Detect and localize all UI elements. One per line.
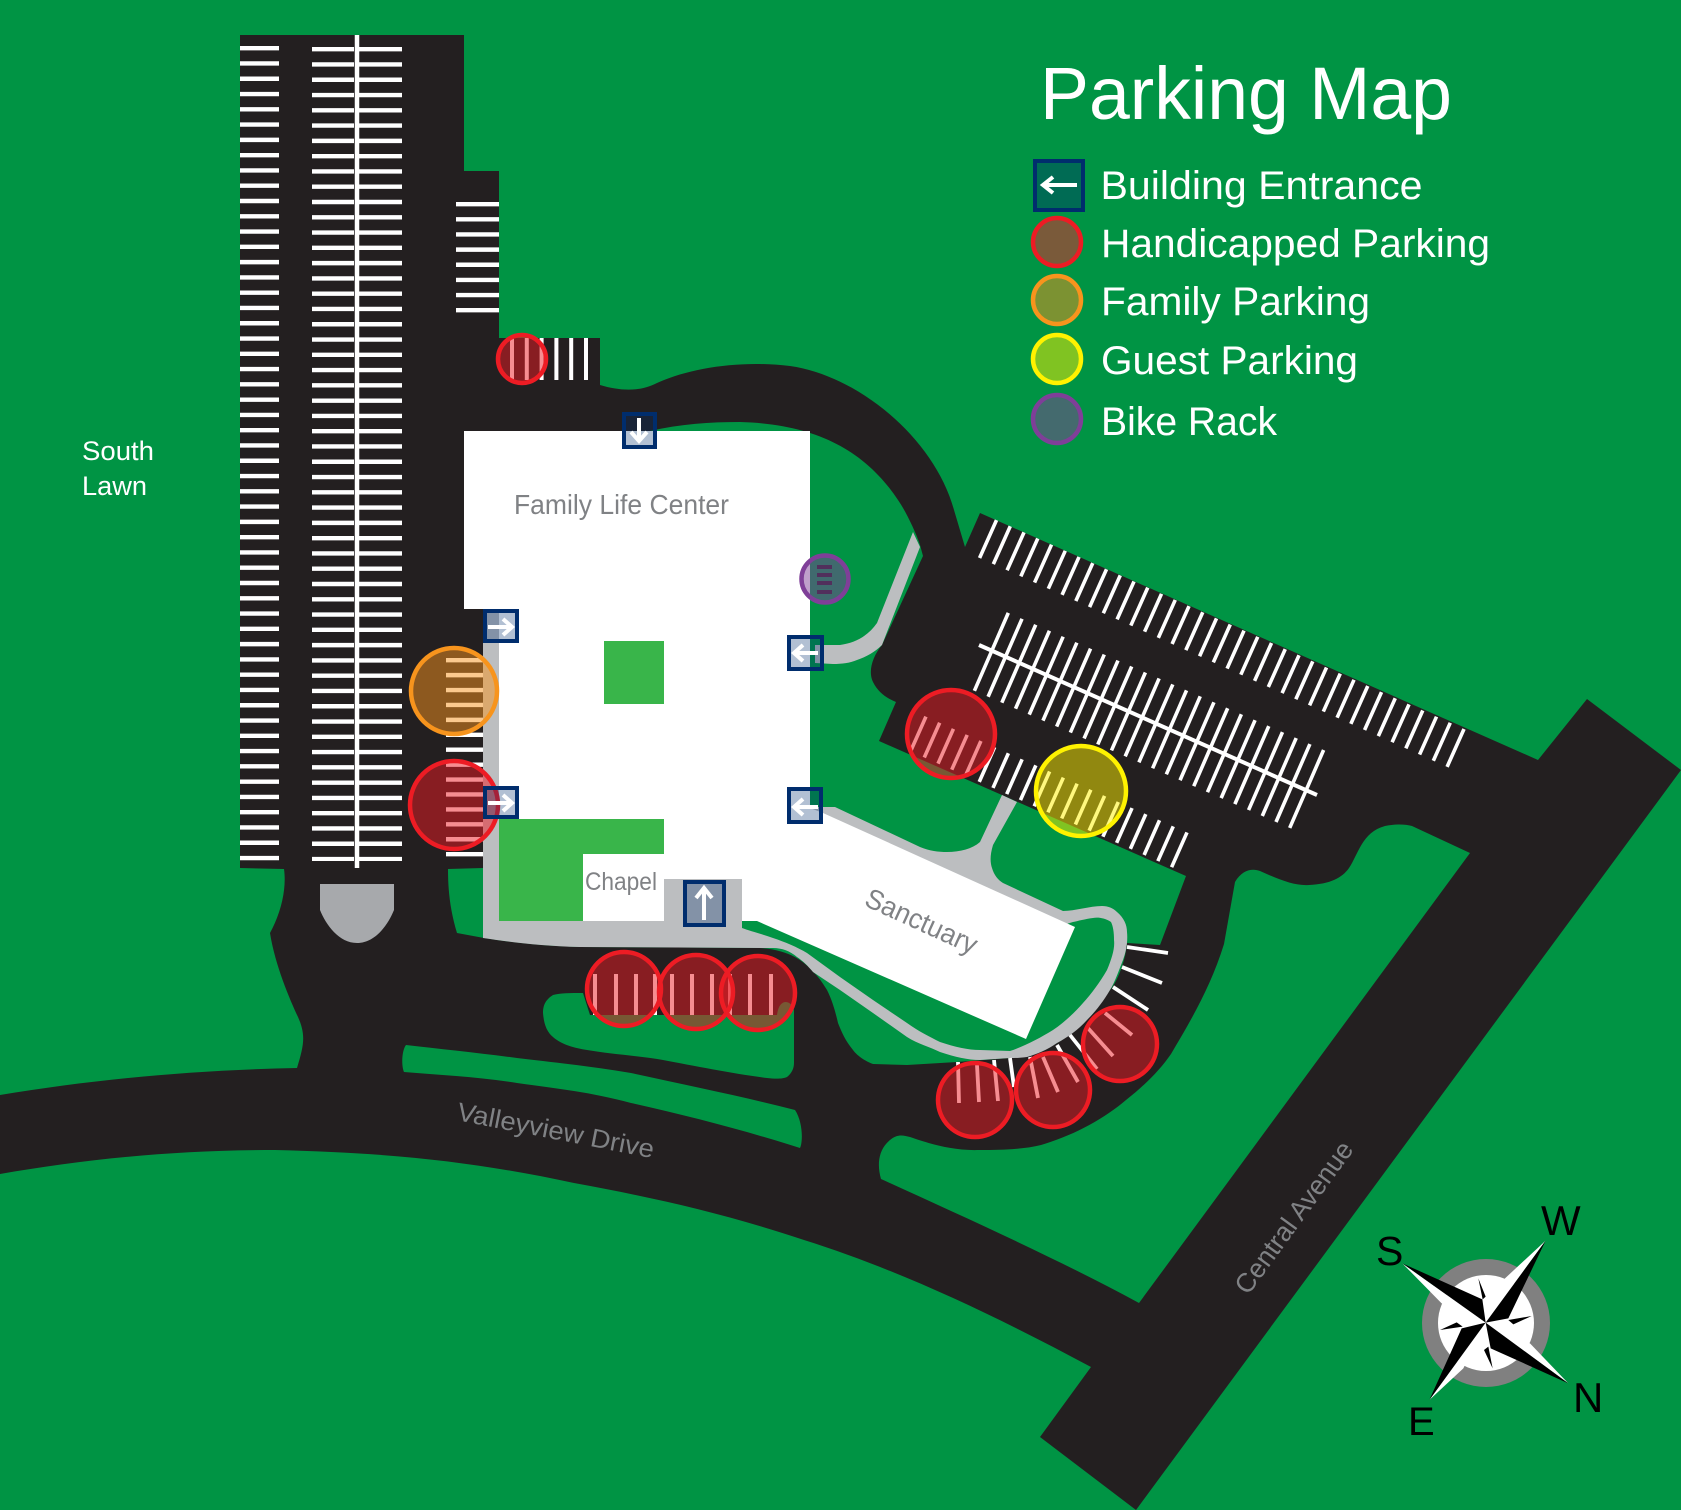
handicapped parking markers bbox=[410, 335, 1157, 1137]
entrance: east lower bbox=[789, 789, 821, 822]
stripes along walkway bbox=[446, 658, 483, 858]
east lot lower row bbox=[917, 733, 1182, 851]
compass points bbox=[1402, 1241, 1568, 1400]
bike rack marker bbox=[802, 556, 848, 602]
curved fan stalls bbox=[958, 947, 1168, 1103]
compass dial bbox=[1422, 1259, 1550, 1387]
compass letter S: S bbox=[1376, 1228, 1403, 1274]
marker: curve 1 bbox=[938, 1063, 1012, 1137]
marker: curve 3 bbox=[1083, 1007, 1157, 1081]
label: South Lawn: South bbox=[82, 436, 154, 466]
bus turnaround island bbox=[320, 884, 394, 943]
label: Valleyview Drive: Valleyview Drive bbox=[455, 1096, 657, 1164]
east lawn between lot and Central Avenue bbox=[879, 824, 1470, 1303]
south drive stalls bbox=[595, 974, 771, 1015]
marker: west lot bbox=[410, 761, 498, 849]
west lot stripes, column 2 bbox=[312, 47, 354, 861]
compass rose bbox=[1376, 1197, 1603, 1444]
legend item: Handicapped Parking: Handicapped Parking bbox=[1101, 222, 1490, 266]
walkway: east entrance to lot bbox=[815, 532, 920, 664]
walkways bbox=[483, 532, 1127, 1060]
compass letter N: N bbox=[1573, 1374, 1603, 1421]
top stalls bbox=[510, 338, 589, 380]
east lot middle double row bbox=[990, 651, 1309, 790]
entrance: west lower bbox=[485, 788, 517, 817]
east lot top row bbox=[986, 538, 1458, 749]
marker: east lot bbox=[907, 690, 995, 778]
legend item: Bike Rack: Bike Rack bbox=[1101, 400, 1278, 444]
west lot stripes, column 1 bbox=[240, 46, 279, 861]
guest parking marker bbox=[1036, 746, 1126, 836]
label: Central Avenue: Central Avenue bbox=[1229, 1135, 1359, 1300]
entrance: west upper bbox=[485, 611, 517, 641]
entrance: chapel bbox=[685, 882, 724, 925]
map labels bbox=[82, 436, 1359, 1300]
landscaped island along Valleyview bbox=[402, 1045, 802, 1148]
legend item: Building Entrance: Building Entrance bbox=[1100, 164, 1422, 208]
central lawn around buildings bbox=[448, 422, 1186, 1065]
parking stripes bbox=[260, 35, 1458, 1103]
compass letter E: E bbox=[1408, 1400, 1435, 1444]
bike rack bars bbox=[817, 567, 832, 592]
legend item: Guest Parking: Guest Parking bbox=[1101, 339, 1358, 383]
east lot middle centre line bbox=[979, 645, 1317, 795]
marker: south drive 1 bbox=[587, 952, 661, 1026]
entrance: east upper bbox=[789, 637, 822, 669]
courtyard green bbox=[604, 641, 664, 704]
landscaped island north of Valleyview bbox=[543, 993, 794, 1079]
chapel garden green bbox=[499, 819, 664, 921]
building footprint bbox=[464, 431, 1075, 1039]
title: Parking Map bbox=[1040, 52, 1452, 135]
label: Chapel: Chapel bbox=[585, 868, 657, 896]
marker: north stalls bbox=[498, 335, 546, 383]
upper side stripes bbox=[456, 202, 499, 313]
walkway: around sanctuary and chapel bbox=[483, 609, 1127, 1060]
legend bbox=[1033, 161, 1490, 444]
building entrance markers bbox=[485, 414, 822, 925]
chapel entrance pad bbox=[664, 879, 742, 929]
label: Sanctuary: Sanctuary bbox=[861, 882, 983, 960]
label: Lawn: Lawn bbox=[82, 471, 147, 501]
entrance: north bbox=[624, 414, 655, 447]
marker: curve 2 bbox=[1016, 1053, 1090, 1127]
marker: south drive 2 bbox=[659, 955, 733, 1029]
legend item: Family Parking: Family Parking bbox=[1101, 280, 1370, 324]
west lot stripes, column 3 bbox=[359, 47, 402, 861]
west lot centre line bbox=[355, 35, 359, 868]
compass letter W: W bbox=[1541, 1197, 1581, 1244]
family parking marker bbox=[411, 648, 497, 734]
marker: south drive 3 bbox=[721, 956, 795, 1030]
buildings bbox=[464, 431, 1075, 1039]
label: Family Life Center: Family Life Center bbox=[514, 489, 729, 520]
legend item: Bike Rack bbox=[1033, 395, 1278, 444]
